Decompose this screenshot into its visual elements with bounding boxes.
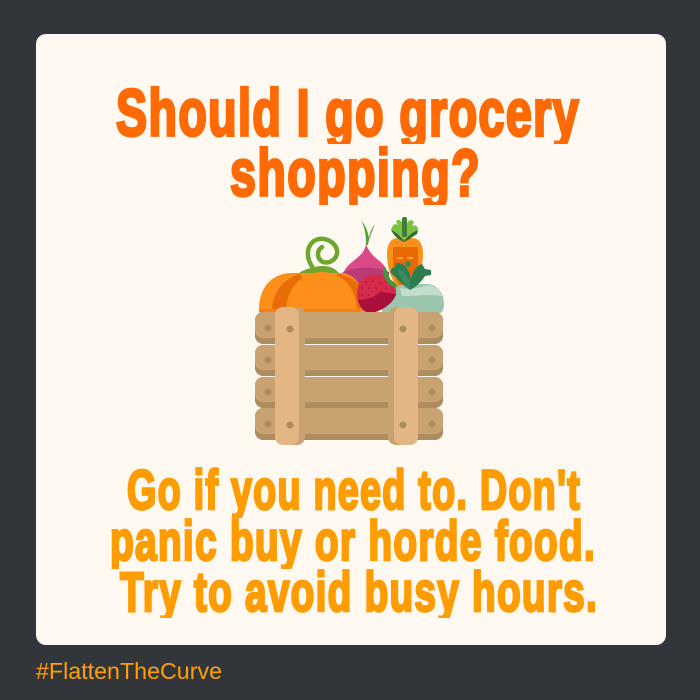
- icon: onion: [343, 220, 389, 290]
- icon: crate slats: [275, 307, 418, 445]
- title: [116, 86, 580, 205]
- icon: plank screws: [264, 324, 436, 428]
- icon: crate planks: [255, 312, 443, 440]
- icon: turnip: [382, 284, 444, 313]
- title: shopping?: [230, 136, 481, 210]
- icon: pumpkin: [259, 239, 366, 312]
- icon: vegetable crate: [255, 217, 444, 445]
- panel: cream card: [36, 34, 666, 645]
- icon: strawberry: [357, 267, 397, 313]
- icon: carrot: [387, 217, 423, 295]
- icon: turnip leaves: [390, 263, 431, 290]
- hashtag: #FlattenTheCurve: [36, 658, 222, 684]
- body text: [110, 459, 598, 623]
